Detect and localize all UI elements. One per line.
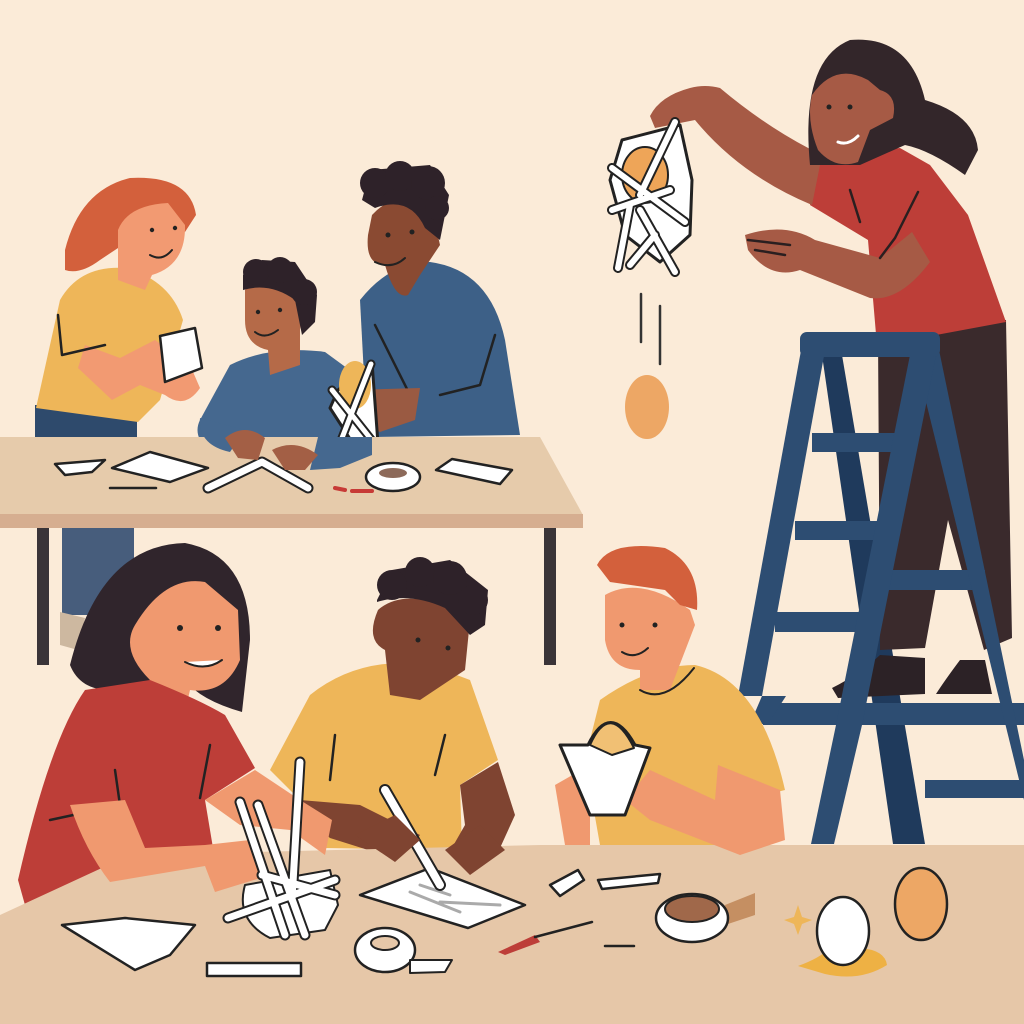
curly-haired man at top table [352,161,520,437]
woman's arm and stick structure [70,762,338,938]
ladder: rear rail [822,355,925,844]
bottom table [0,845,1024,1024]
top table [0,437,583,665]
bottom left woman [18,543,255,905]
child at top table [198,257,378,444]
table items: paper, strips, tape, egg [62,868,947,977]
hair [808,40,978,175]
woman dropping the egg [650,40,1012,698]
shoes [832,655,992,698]
hanging egg contraption [610,122,692,272]
red shirt [810,148,1006,346]
trousers [878,320,1012,650]
falling egg [625,294,669,439]
face [810,74,894,164]
shirt seams [748,190,918,258]
red-haired woman at top table [35,178,202,650]
bottom right man [585,546,785,850]
lower arm [745,230,930,298]
child's arms and sticks on the table [200,418,372,488]
centre man's hands and pencil [355,790,505,885]
raised arm [650,86,822,205]
ladder: front frame [738,332,1024,844]
bottom centre man [270,557,515,870]
right man's arms and wrapped egg [555,722,785,855]
